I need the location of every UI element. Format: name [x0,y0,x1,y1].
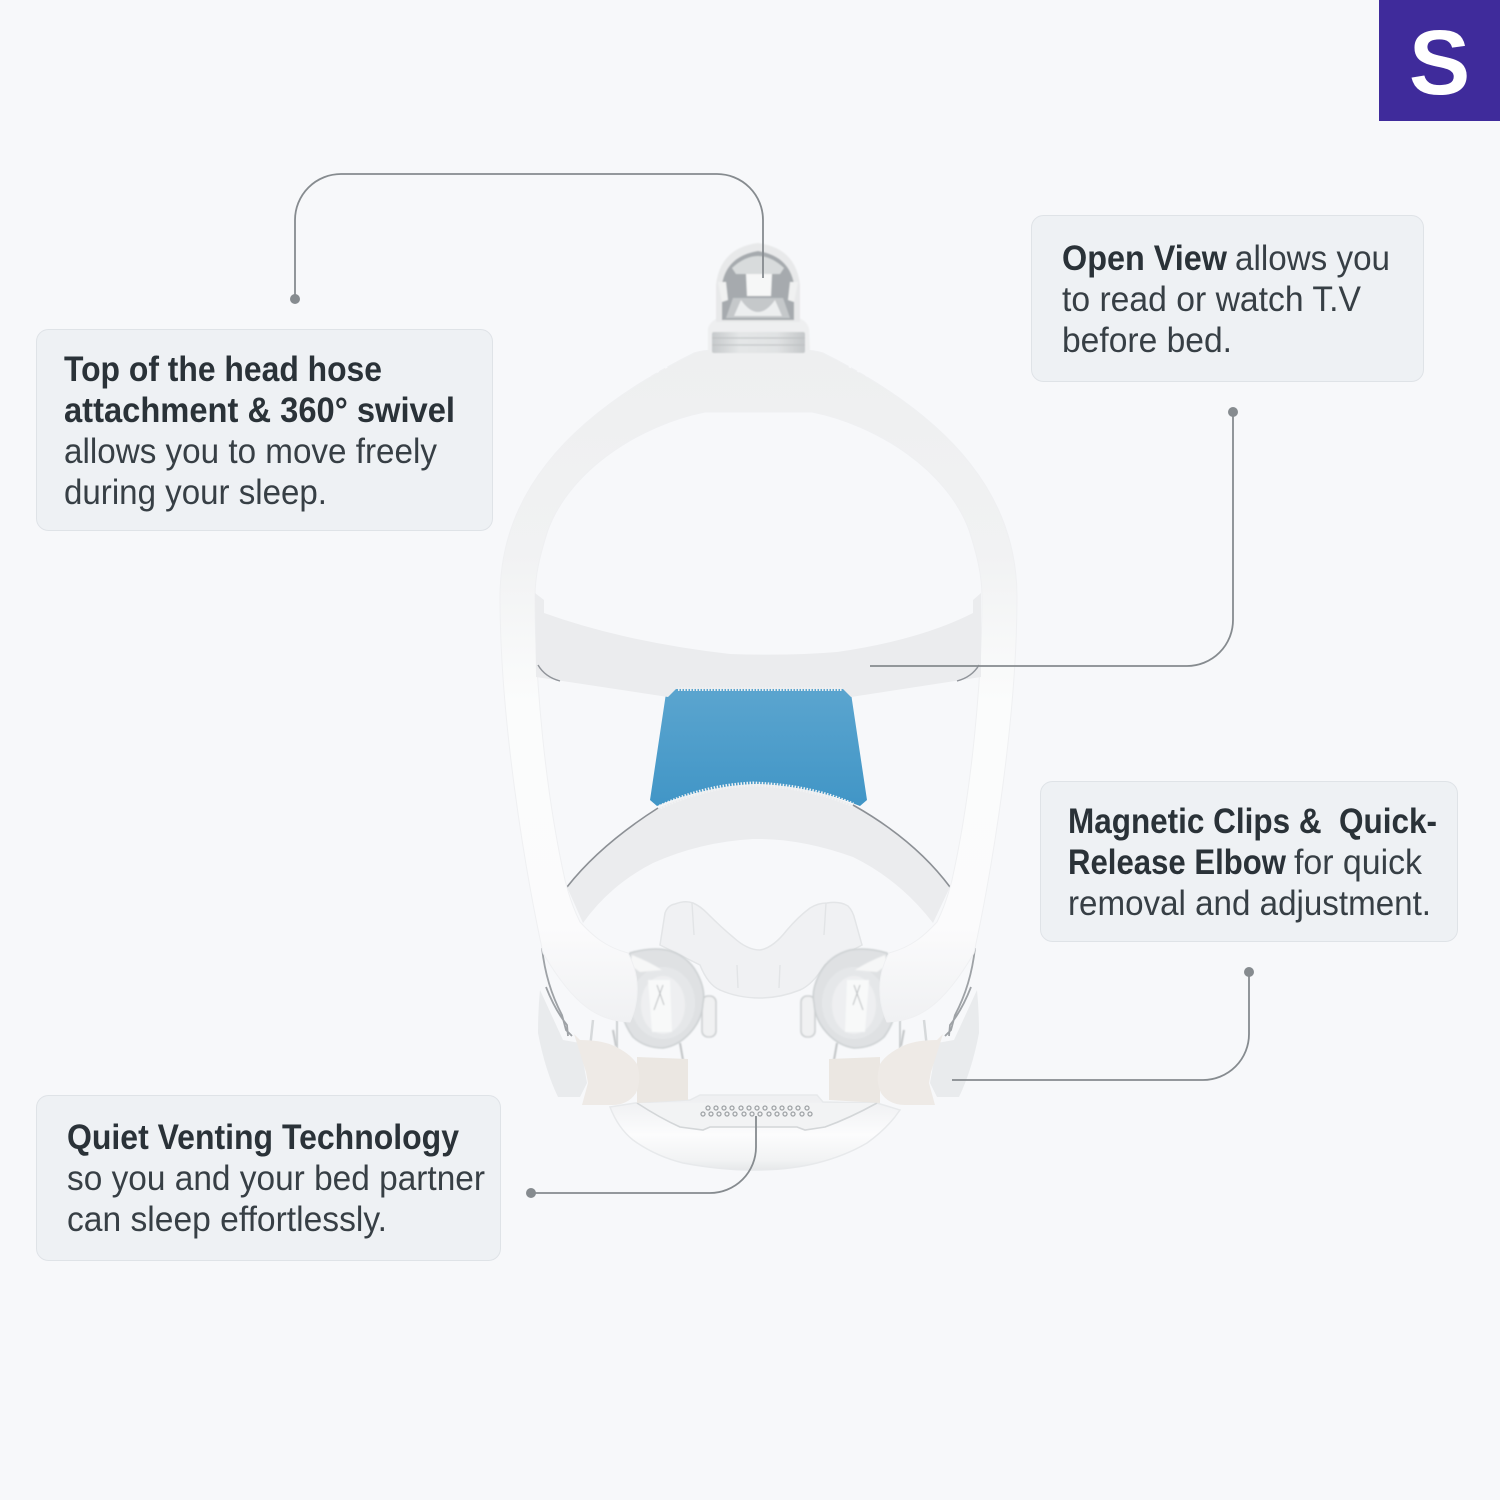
nasal cushion [660,902,862,998]
callout text: Magnetic Clips & Quick- [1068,802,1437,841]
left magnetic clip [574,1034,688,1105]
upper strap dark marks [538,665,979,681]
cushion inner frame [637,1103,877,1130]
size badge: S [1409,12,1470,114]
callout: top of the head hose [36,330,492,530]
callout: quiet venting [36,1096,500,1260]
tube rib notches [516,366,1001,507]
right clear port [801,949,904,1060]
strap dark edges [567,805,950,887]
connector: open view [870,407,1238,666]
callout: open view [1032,216,1424,382]
callout text [67,1118,485,1239]
lower cushion [610,1095,900,1170]
lower strap fringe [660,784,853,807]
callout text: so you and your bed partner [67,1159,485,1198]
swivel collar [708,318,810,353]
callout text: Quiet Venting Technology [67,1118,459,1157]
connector: top hose swivel [290,174,763,304]
left side foam tab [538,990,587,1097]
lower foam strap [567,784,950,923]
callout text [1062,239,1390,360]
side frame wires [542,948,975,1036]
CPAP mask illustration [500,243,1017,1170]
callout text: can sleep effortlessly. [67,1200,387,1239]
upper strap fringe [678,687,842,691]
cushion centre fold [692,903,826,988]
callout text: allows you [1235,239,1390,278]
callout text [1068,802,1437,923]
frame stems [590,1020,927,1048]
callout text: before bed. [1062,321,1232,360]
left clear port [613,949,716,1060]
size badge [1379,0,1500,121]
callout text: attachment & 360° swivel [64,391,455,430]
right side foam tab [930,990,979,1097]
connector: quiet venting [526,1116,756,1198]
callout text: Open View [1062,239,1228,278]
right magnetic clip [829,1034,943,1105]
callout text: to read or watch T.V [1062,280,1362,319]
callout text: for quick [1294,843,1422,882]
vent holes [701,1106,812,1116]
upper foam strap [535,593,981,697]
callout text: allows you to move freely [64,432,437,471]
callout text: Release Elbow [1068,843,1287,882]
callout text: removal and adjustment. [1068,884,1431,923]
callout text: during your sleep. [64,473,327,512]
connector: magnetic clips [952,967,1254,1080]
callout text [64,350,455,512]
callout text: Top of the head hose [64,350,382,389]
hollow head tube frame [500,350,1017,1022]
callout: magnetic clips [1040,782,1458,942]
blue headgear panel [650,680,867,806]
swivel elbow dome [716,243,800,322]
